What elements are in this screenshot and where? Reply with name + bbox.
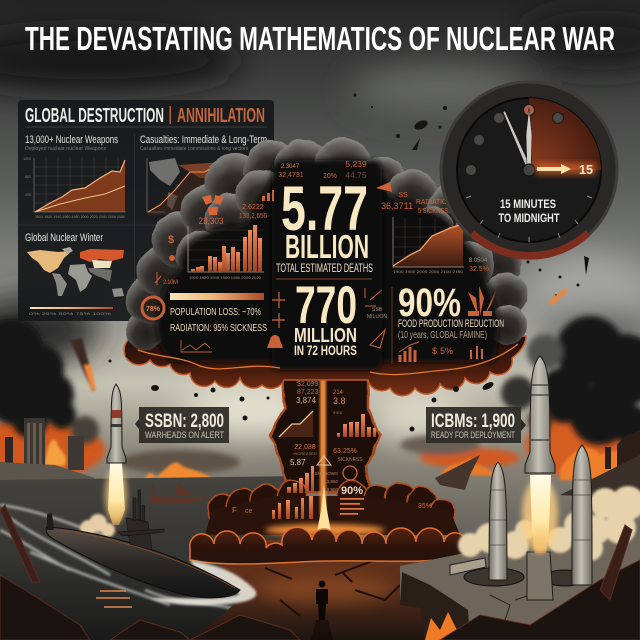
map: global nuclear winter: 0% 25% 50% 75% 100% [29,312,111,316]
chart: nuclear weapons: 800 [25,175,31,179]
population and radiation text [170,306,267,334]
small cloud figures top: 44.75 [345,170,367,180]
small cloud figures left: 2.10M [163,280,178,286]
stem lower data: 22,038 [294,444,316,451]
stem data: 3.8 [333,396,346,406]
stem lower data: 90% [341,485,363,497]
callout: ICBM deployment [426,407,526,443]
callout: SSBN warheads [135,407,229,443]
stem small bars [272,466,364,519]
smoke columns and burning horizon [0,316,640,481]
stem data: 214 [333,390,344,396]
cap lobes [126,138,528,350]
rocket: SSBN launching [107,384,126,463]
cap glowing edge lines [138,344,518,375]
small cloud figures right: SS [398,192,408,199]
stat: 90 percent food: 90% [398,281,461,325]
small cloud figures left: $ [168,234,174,246]
water with foam [0,476,300,640]
divider under deaths [276,278,372,280]
base dark fill [205,496,460,535]
callout: SSBN warheads: SSBN: 2,800 [145,411,224,432]
debris specks [108,94,580,432]
small cloud figures right: RADIATION! [416,199,454,206]
small icons near 90 percent: MILLION [367,314,387,320]
headline stat: total deaths: TOTAL ESTIMATED DEATHS [276,261,373,275]
small icons near 90 percent: 5% [440,346,453,356]
bow wave smoke [80,514,115,537]
small cloud figures right [376,182,489,273]
map: global nuclear winter [25,232,124,316]
ruined city left [0,418,95,490]
stem data: 3,874 [296,396,317,405]
chart: nuclear weapons: 400 [25,193,31,197]
chart: nuclear weapons: 1200 [23,157,31,161]
small cloud figures right: 5 SICKNESS [418,208,452,215]
stat: 770 million: MILLION [294,325,357,347]
stem bar chart [337,414,376,437]
base cloud numbers: 35% [418,503,432,510]
icon: radiation symbol: 23,303 [198,216,224,227]
clock caption: TO MIDNIGHT [498,211,560,225]
panel heading: ANNIHILATION [177,105,265,127]
base cloud numbers [232,503,432,515]
ring: 78 percent: 78% [146,306,161,313]
chart: casualties: Casualties: Immediate & Long-Term [140,134,267,146]
cap bottom rim [124,336,526,396]
ring: 78 percent [142,297,164,319]
small cloud figures top: 5,239 [345,159,367,169]
billowing launch smoke right [458,486,640,561]
small cloud figures left: 133,2,656 [239,213,267,220]
small cloud figures top: 32,4731 [278,172,304,179]
small icons near 90 percent [267,288,483,362]
stem lower data: 3,860 [327,479,338,484]
clock hands [503,108,535,176]
divider between 770 and 90 [391,287,393,364]
stem data: $2,099 [297,381,319,388]
icon: radiation symbol [198,195,224,227]
stem lower data [290,444,363,497]
ruins right [435,430,640,500]
small cloud figures top: 2.3047 [281,164,300,170]
stem lower data: SHADOWS [315,471,338,476]
stem lower data: SICKNESS [337,457,363,463]
stem lower data: 9,900 [327,487,338,492]
clock caption: 15 MINUTES [500,197,556,211]
bar chart: left cloud [188,225,264,280]
stat: 770 million [294,276,357,358]
stem line chart [279,411,313,437]
headline stat: total deaths [276,174,373,275]
small cloud figures left: 2.6222 [242,204,264,211]
mini line chart [181,340,212,352]
stat: 90 percent food: (10 years, GLOBAL FAMINE) [398,329,487,341]
silo platform [400,535,640,640]
clock hour studs [466,104,564,176]
minutes label: 15 [579,162,593,177]
icon: wheat [468,286,496,316]
stat: 90 percent food [398,281,504,341]
rocket: ICBM silo left [489,462,507,580]
base front lobes glowing [190,527,466,564]
dark data zone [156,160,500,370]
submarine [46,490,240,598]
cloud stem [270,372,380,492]
small icons near 90 percent: SSB [372,307,383,313]
silhouette: lone figure [311,580,333,640]
chart: nuclear weapons: 13,000+ Nuclear Weapons [25,134,118,146]
doomsday clock [441,82,617,275]
small cloud figures right: 8.0504 [469,258,488,264]
clock caption [498,197,560,225]
small cloud figures left [155,190,274,286]
mushroom cloud [124,138,528,564]
wrecked ships [150,482,212,503]
stem data [296,381,346,415]
small icons near 90 percent: $ [432,346,437,356]
icon: launch flame right [522,475,558,553]
callout: ICBM deployment: ICBMs: 1,900 [431,411,515,432]
stem data: 87,223 [297,389,319,396]
stem lower data: 63.25% [333,448,357,455]
small cloud figures top: 20% [323,173,337,180]
stat: 770 million: 770 [295,276,357,335]
ground plain in front of stem [190,540,470,640]
area chart: right cloud [393,217,464,274]
chart: casualties: Casualties immediate commissions & long vectors [140,146,248,152]
callout: ICBM deployment: READY FOR DEPLOYMENT [431,430,515,440]
population and radiation text: RADIATION: 95% SICKNESS [170,322,267,334]
small cloud figures right: 32.5% [469,266,489,273]
stem lower data: 5.87 [290,458,306,467]
stem data: $ $ $ [333,410,343,415]
population and radiation text: POPULATION LOSS: ~70% [170,306,261,318]
base cloud numbers: ce [245,508,252,515]
headline stat: total deaths: 5.77 [281,174,368,244]
submarine sail [118,490,164,550]
chart: casualties [140,134,267,215]
chart: nuclear weapons: Deployed nuclear nuclear Weapons [25,146,107,152]
headline stat: total deaths: BILLION [285,228,369,265]
stat: 90 percent food: FOOD PRODUCTION REDUCTION [398,318,504,330]
stat: 770 million: IN 72 HOURS [294,343,357,358]
icon: fireball right [548,288,568,305]
rocket: ICBM launching [525,356,555,473]
rocket: ICBM silo right [572,445,592,585]
base cloud numbers: F [232,506,237,515]
foreground debris right [440,525,640,640]
icon: falling fireball left [70,338,96,391]
foam around submarine stern [150,560,256,605]
chart: nuclear weapons: 1900 1920 1940 1960 1980 2000 2020 2040 2060 2080 [35,215,125,219]
fire glow and central column [265,375,385,536]
info panel: global destruction [18,100,274,321]
population progress bar [170,293,264,300]
launch pad block [527,552,553,600]
base back lobes [207,480,455,525]
callout: SSBN warheads: WARHEADS ON ALERT [145,430,224,441]
panel heading: GLOBAL DESTRUCTION [25,105,164,127]
foreground debris left [0,505,300,640]
area chart: right cloud: 1900 1950 2000 2050 2100 2150 [393,269,464,274]
bar chart: left cloud: 1900 1920 1940 1960 1980 2000 2020 [189,275,262,280]
chart: nuclear weapons [23,134,126,219]
glowing arrow [536,163,596,175]
stem lower data: INCREASED [293,451,317,456]
map: global nuclear winter: Global Nuclear Winter [25,232,103,244]
small cloud figures top [278,159,367,180]
clock minute ticks [466,196,592,242]
small cloud figures right: 36,3711 [381,201,413,211]
icon: launch flame left [105,463,127,525]
